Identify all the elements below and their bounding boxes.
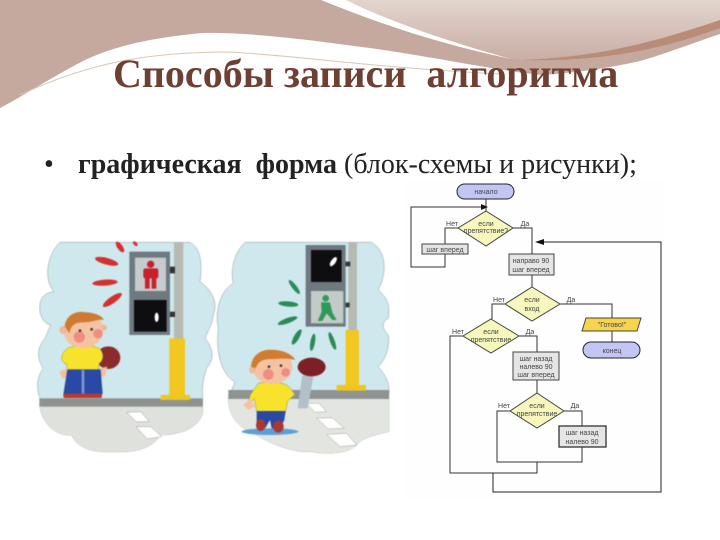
decision: препятствие 3: Нет: [498, 403, 511, 410]
decision: препятствие 2: Да: [526, 329, 534, 336]
decision: препятствие 1: Нет: [446, 221, 459, 228]
decision: препятствие 1: если: [478, 221, 494, 228]
box: шаг назад налево: шаг назад: [520, 356, 552, 363]
box: шаг вперёд: шаг вперед: [426, 247, 464, 254]
decision: препятствие 2: Нет: [452, 329, 465, 336]
decision: вход: вход: [525, 306, 539, 313]
box: шаг назад налево: [513, 352, 559, 380]
decision: препятствие 1: препятствие?: [464, 228, 508, 235]
bullet text: графическая форма (блок-схемы и рисунки);: [78, 149, 637, 180]
title: Способы записи алгоритма: [113, 51, 618, 96]
end terminator: конец: [603, 348, 621, 355]
decision: вход: [493, 287, 575, 321]
box: шаг вперёд: [422, 244, 468, 254]
box: направо 90: направо 90: [513, 258, 549, 265]
decision: препятствие 1: Да: [521, 221, 529, 228]
decorative header wave: [0, 0, 720, 108]
output: готово: "Готово!": [598, 322, 627, 329]
decision: препятствие 3: Да: [571, 403, 579, 410]
decision: препятствие 2: если: [483, 329, 499, 336]
decision: вход: Да: [567, 297, 575, 304]
box: шаг назад налево: налево 90: [519, 364, 553, 371]
decision: препятствие 3: препятствие: [517, 411, 557, 418]
decision: препятствие 3: если: [529, 403, 545, 410]
start terminator: [457, 184, 514, 199]
decision: вход: если: [524, 297, 540, 304]
box: направо 90: [509, 254, 554, 275]
decision: препятствие 1: [446, 211, 529, 246]
decision: препятствие 2: препятствие: [471, 337, 511, 344]
bullet text: •: [44, 149, 54, 180]
box: шаг назад налево: шаг вперед: [517, 372, 555, 379]
start terminator: начало: [474, 189, 498, 196]
output: готово: [582, 318, 641, 331]
box: шаг назад: [559, 426, 606, 447]
decision: препятствие 3: [498, 393, 579, 428]
box: направо 90: шаг вперед: [512, 267, 550, 274]
decision: препятствие 2: [452, 319, 534, 353]
box: шаг назад: шаг назад: [566, 430, 598, 437]
box: шаг назад: налево 90: [565, 439, 599, 446]
end terminator: [583, 342, 640, 358]
decision: вход: Нет: [493, 297, 506, 304]
